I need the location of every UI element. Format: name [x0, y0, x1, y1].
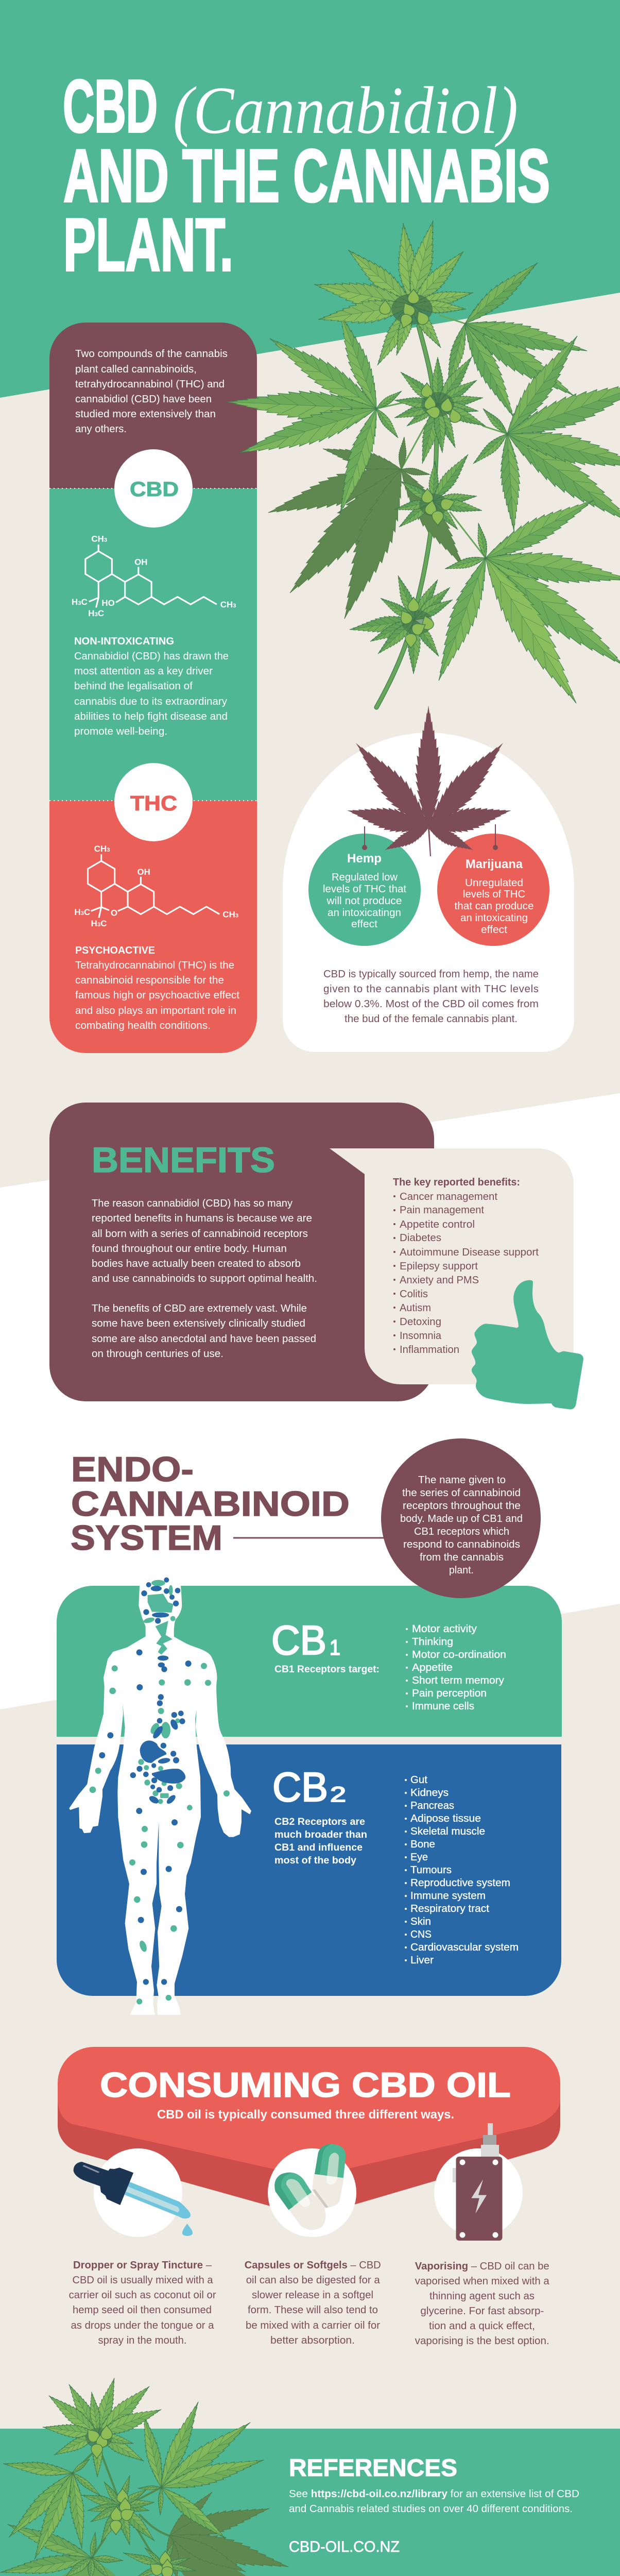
connector line — [233, 1537, 385, 1538]
text block: benefits explanation: some are also anecdotal and have been passed — [92, 1333, 316, 1345]
speech bubble: key reported benefits: Insomnia — [400, 1330, 442, 1342]
circle: definition: the series of cannabinoid — [402, 1487, 521, 1499]
leaf: left fan leaf — [226, 309, 404, 517]
background: white diagonal band — [0, 1093, 620, 1709]
list: CB2 targets: Liver — [410, 1954, 434, 1966]
chart: THC molecule: H3C — [74, 907, 90, 917]
text block: references note — [289, 2488, 579, 2515]
text block: vaporising: thinning agent such as — [429, 2290, 535, 2302]
panel section: introduction — [49, 323, 257, 488]
circle: definition: receptors throughout the — [403, 1500, 521, 1512]
heading: benefits: BENEFITS — [92, 1140, 275, 1180]
speech bubble: key reported benefits: Colitis — [400, 1288, 428, 1300]
circle: definition: plant. — [449, 1564, 474, 1576]
panel section: CBD — [49, 488, 257, 801]
text block: psychoactive: famous high or psychoactive effect — [75, 989, 239, 1001]
list: CB1 targets: Pain perception — [412, 1687, 487, 1699]
illustration: human body with receptors — [70, 1573, 251, 2014]
text block: references note: See https://cbd-oil.co.nz/library for an extensive list of CBD — [289, 2488, 579, 2500]
heading: endocannabinoid system: CANNABINOID — [71, 1484, 350, 1523]
chart: CBD molecule: H3C — [72, 597, 88, 607]
list: CB2 targets: Cardiovascular system — [410, 1941, 519, 1953]
chart: CBD molecule — [72, 534, 236, 618]
icon: thumbs up — [472, 1280, 583, 1410]
text block: non-intoxicating: cannabis due to its extraordinary — [74, 696, 228, 707]
text block: capsules or softgels: slower release in a softgel — [252, 2289, 373, 2301]
text block: CB1: 1 — [330, 1635, 340, 1659]
panel section: THC — [49, 801, 257, 1053]
bud cluster: middle — [393, 450, 483, 533]
subheading: CBD oil is typically consumed three different ways. — [157, 2108, 454, 2122]
text block: capsules or softgels: better absorption. — [270, 2334, 355, 2346]
list: CB2 targets: Respiratory tract — [410, 1903, 489, 1914]
text block: dropper or spray tincture: hemp seed oil then consumed — [73, 2304, 212, 2316]
chart: CBD molecule: OH — [134, 557, 147, 567]
chart: THC molecule: O — [111, 908, 117, 918]
text block: psychoactive: and also plays an important role in — [75, 1005, 236, 1016]
icon: vaporiser — [434, 2123, 523, 2241]
list: CB2 targets: Immune system — [410, 1890, 486, 1902]
list: CB1 targets: Immune cells — [412, 1700, 474, 1712]
circle: marijuana: that can produce — [454, 900, 533, 912]
pointer: hemp — [362, 826, 367, 850]
text block: non-intoxicating: NON-INTOXICATING — [74, 635, 174, 647]
heading: consuming CBD oil: CONSUMING CBD OIL — [100, 2065, 511, 2105]
circle: marijuana: an intoxicating — [460, 912, 528, 924]
badge: THC — [114, 763, 193, 841]
circle: definition: respond to cannabinoids — [403, 1538, 520, 1550]
heading: endocannabinoid system: ENDO- — [71, 1450, 194, 1489]
chart: THC molecule: CH3 — [94, 844, 110, 854]
banner: shadow layer — [58, 2099, 560, 2217]
text block: CB2: CB1 and influence — [274, 1842, 363, 1853]
list: CB1 targets: Thinking — [412, 1636, 453, 1648]
chart: THC molecule — [74, 844, 238, 928]
list: CB2 targets: Adipose tissue — [410, 1812, 481, 1824]
text block: CB2: most of the body — [274, 1855, 356, 1866]
text block: benefits explanation: some have been extensively clinically studied — [92, 1317, 305, 1329]
list: CB1 targets: Motor co-ordination — [412, 1649, 506, 1660]
speech bubble: key reported benefits: Pain management — [400, 1204, 484, 1216]
text block: dropper or spray tincture: Dropper or Spray Tincture – — [73, 2259, 212, 2271]
speech bubble: key reported benefits: Diabetes — [400, 1232, 441, 1244]
list: CB1 targets: Motor activity — [412, 1623, 477, 1635]
list: CB2 targets: Bone — [410, 1838, 435, 1850]
circle: definition — [381, 1438, 541, 1598]
list: CB2 targets: Tumours — [410, 1864, 452, 1876]
badge: THC: THC — [130, 791, 177, 815]
text block: CB2: CB — [272, 1764, 328, 1810]
list: CB2 targets: Gut — [410, 1774, 427, 1786]
circle: hemp: Hemp — [347, 852, 382, 866]
speech bubble: key reported benefits: The key reported benefits: — [393, 1176, 520, 1188]
list: CB1 targets: Short term memory — [412, 1674, 505, 1686]
leaf: footer left fan leaf — [2, 2457, 103, 2563]
list: CB1 targets: Appetite — [412, 1662, 453, 1673]
leaf: dark fan leaf — [264, 436, 474, 625]
circle: hemp: levels of THC that — [323, 883, 406, 895]
text block: non-intoxicating: promote well-being. — [74, 725, 167, 737]
text block: CBD source — [323, 968, 539, 1025]
text block: CB1: CB — [271, 1617, 326, 1663]
text block: psychoactive — [75, 944, 239, 1031]
text block: introduction: plant called cannabinoids, — [75, 363, 197, 375]
title: PLANT. — [63, 203, 233, 286]
panel: CBD and THC column — [49, 323, 257, 1053]
bud cluster: top — [312, 218, 475, 369]
circle: definition: CB1 receptors which — [414, 1526, 509, 1537]
title: CBD — [63, 64, 158, 148]
background: green header band — [0, 0, 620, 398]
text block: vaporising: glycerine. For fast absorp- — [420, 2305, 544, 2317]
text block: dropper or spray tincture: carrier oil such as coconut oil or — [69, 2289, 216, 2301]
circle: definition: from the cannabis — [420, 1551, 504, 1563]
text block: vaporising — [415, 2260, 549, 2347]
text block: psychoactive: PSYCHOACTIVE — [75, 944, 155, 956]
text block: benefits explanation: The reason cannabidiol (CBD) has so many — [92, 1197, 293, 1209]
receptors: green — [90, 1580, 230, 2005]
list: CB2 targets: Reproductive system — [410, 1877, 510, 1889]
text block: dropper or spray tincture: CBD oil is usually mixed with a — [72, 2274, 213, 2286]
text block: references note: and Cannabis related studies on over 40 different conditions. — [289, 2503, 573, 2515]
text block: CB1: CB1 Receptors target: — [274, 1664, 380, 1675]
panel: hemp and marijuana — [283, 705, 574, 1052]
text block: psychoactive: combating health conditions. — [75, 1020, 211, 1031]
text block: introduction — [75, 348, 228, 435]
text block: CB2: much broader than — [274, 1829, 367, 1840]
circle: marijuana: levels of THC — [463, 888, 525, 900]
circle: definition: The name given to — [418, 1474, 506, 1486]
list: CB2 targets: Eye — [410, 1851, 428, 1863]
circle: hemp: an intoxicatingn — [328, 907, 401, 919]
panel: CB2 — [57, 1744, 561, 1996]
list: CB2 targets: Skin — [410, 1916, 431, 1927]
text block: benefits explanation — [92, 1197, 317, 1360]
bud cluster: lower — [349, 573, 455, 674]
website: CBD-OIL.CO.NZ — [289, 2538, 400, 2555]
list: CB2 targets: Pancreas — [410, 1800, 454, 1811]
illustration: cannabis plant — [226, 218, 620, 712]
pointer: marijuana — [493, 824, 498, 850]
speech bubble: key reported benefits — [330, 1148, 574, 1384]
heading: endocannabinoid system — [71, 1450, 350, 1557]
text block: CBD source: below 0.3%. Most of the CBD oil comes from — [323, 998, 539, 1010]
speech bubble: key reported benefits: Detoxing — [400, 1316, 441, 1328]
text block: introduction: any others. — [75, 423, 127, 435]
leaf: right fan leaf — [470, 329, 620, 536]
badge: CBD — [114, 449, 193, 528]
banner: top layer — [58, 2047, 560, 2177]
text block: CBD source: the bud of the female cannabis plant. — [345, 1013, 518, 1025]
text block: dropper or spray tincture — [69, 2259, 216, 2346]
background: green footer band — [0, 2429, 620, 2576]
text block: capsules or softgels: be mixed with a carrier oil for — [246, 2319, 380, 2331]
circle: hemp: Regulated low — [332, 871, 398, 883]
list: CB2 targets: CNS — [410, 1928, 432, 1940]
leaf: footer dark fan leaf — [164, 2487, 291, 2576]
plant stems — [376, 315, 507, 707]
circle: marijuana — [437, 834, 549, 946]
panel: benefits — [49, 1103, 583, 1410]
speech bubble: key reported benefits: Autism — [400, 1302, 431, 1314]
text block: vaporising: vaporising is the best option. — [415, 2335, 549, 2347]
circle: hemp: effect — [351, 918, 377, 930]
text block: CB2 — [272, 1764, 367, 1866]
text block: introduction: tetrahydrocannabinol (THC) and — [75, 378, 225, 390]
leaf: upper right fan leaf — [441, 256, 590, 422]
speech bubble: key reported benefits: Anxiety and PMS — [400, 1274, 479, 1286]
speech bubble: key reported benefits: Epilepsy support — [400, 1260, 478, 1272]
text block: benefits explanation: on through centuries of use. — [92, 1348, 223, 1360]
text block: benefits explanation: all born with a series of cannabinoid receptors — [92, 1228, 308, 1240]
section: endocannabinoid system panels — [57, 1438, 562, 2014]
speech bubble: key reported benefits: Cancer management — [400, 1191, 497, 1202]
text block: benefits explanation: and use cannabinoids to support optimal health. — [92, 1273, 317, 1284]
chart: THC molecule: H3C — [91, 919, 107, 928]
circle: marijuana: effect — [481, 924, 507, 936]
chart: CBD molecule: HO — [101, 598, 115, 608]
icon: capsules — [268, 2144, 356, 2237]
chart: CBD molecule: CH3 — [220, 600, 236, 609]
text block: dropper or spray tincture: spray in the mouth. — [98, 2334, 186, 2346]
text block: introduction: studied more extensively than — [75, 408, 216, 420]
text block: benefits explanation: reported benefits in humans is because we are — [92, 1212, 312, 1224]
text block: non-intoxicating: most attention as a key driver — [74, 665, 213, 677]
chart: CBD molecule: H3C — [88, 608, 104, 618]
speech bubble: key reported benefits: Inflammation — [400, 1344, 459, 1355]
speech bubble: key reported benefits: Autoimmune Disease support — [400, 1246, 539, 1258]
icon: maroon cannabis leaf — [345, 705, 514, 856]
footer plant stems — [73, 2445, 169, 2567]
text block: CBD source: CBD is typically sourced from hemp, the name — [323, 968, 539, 980]
list: CB2 targets — [405, 1774, 519, 1966]
text block: non-intoxicating — [74, 635, 229, 737]
panel: CB1 — [57, 1586, 562, 1737]
circle: hemp — [308, 834, 421, 946]
text block: benefits explanation: The benefits of CBD are extremely vast. While — [92, 1302, 307, 1314]
text block: introduction: cannabidiol (CBD) have been — [75, 393, 212, 405]
text block: capsules or softgels — [245, 2259, 381, 2346]
section: consuming CBD oil — [58, 2047, 560, 2347]
footer: references — [289, 2454, 579, 2555]
text block: dropper or spray tincture: as drops under the tongue or a — [71, 2319, 214, 2331]
text block: vaporising: Vaporising – CBD oil can be — [415, 2260, 549, 2272]
chart: THC molecule: OH — [137, 867, 150, 877]
text block: CB2: CB2 Receptors are — [274, 1817, 365, 1827]
panel background — [49, 1103, 434, 1401]
panel background arch — [283, 733, 574, 1052]
icon: dropper — [74, 2148, 193, 2237]
text block: benefits explanation: found throughout our entire body. Human — [92, 1243, 287, 1255]
text block: capsules or softgels: form. These will also tend to — [248, 2304, 378, 2316]
receptors: blue — [99, 1578, 192, 1985]
title: (Cannabidiol) — [173, 73, 518, 148]
heading: references: REFERENCES — [289, 2454, 457, 2481]
illustration: footer cannabis plant — [0, 2376, 291, 2576]
list: CB1 targets — [406, 1623, 506, 1712]
text block: CBD source: given to the cannabis plant with THC levels — [323, 983, 539, 995]
bud cluster: upper — [393, 353, 488, 466]
text block: non-intoxicating: Cannabidiol (CBD) has drawn the — [74, 650, 229, 662]
circle: marijuana: Marijuana — [466, 857, 523, 871]
chart: CBD molecule: CH3 — [91, 534, 107, 544]
leaf: lower right fan leaf — [427, 489, 620, 712]
text block: vaporising: vaporised when mixed with a — [415, 2275, 549, 2287]
list: CB2 targets: Skeletal muscle — [410, 1825, 485, 1837]
text block: capsules or softgels: oil can also be digested for a — [246, 2274, 380, 2286]
text block: psychoactive: Tetrahydrocannabinol (THC) is the — [75, 959, 234, 971]
bud cluster: footer top — [42, 2376, 164, 2477]
text block: benefits explanation: bodies have actually been created to absorb — [92, 1258, 301, 1269]
speech bubble: key reported benefits: Appetite control — [400, 1218, 475, 1230]
heading: endocannabinoid system: SYSTEM — [71, 1518, 222, 1557]
title — [63, 64, 550, 286]
text block: non-intoxicating: behind the legalisation of — [74, 680, 193, 692]
leaf: footer bottom fan leaf — [0, 2517, 126, 2576]
text block: vaporising: tion and a quick effect, — [429, 2320, 535, 2332]
text block: CB2: 2 — [330, 1782, 346, 1806]
body silhouette — [70, 1573, 251, 2014]
circle: definition: body. Made up of CB1 and — [400, 1513, 523, 1524]
chart: THC molecule: CH3 — [222, 910, 238, 920]
list: CB2 targets: Kidneys — [410, 1787, 449, 1799]
text block: CB1 — [271, 1617, 380, 1675]
bud cluster: footer lower — [122, 2540, 197, 2576]
bud cluster: footer middle — [81, 2475, 159, 2546]
text block: psychoactive: cannabinoid responsible for the — [75, 974, 224, 986]
text block: capsules or softgels: Capsules or Softgels – CBD — [245, 2259, 381, 2271]
badge: CBD: CBD — [130, 478, 179, 501]
circle: hemp: will not produce — [326, 895, 402, 907]
circle: marijuana: Unregulated — [465, 877, 523, 889]
leaf: footer right fan leaf — [137, 2398, 266, 2544]
text block: non-intoxicating: abilities to help fight disease and — [74, 710, 228, 722]
text block: introduction: Two compounds of the cannabis — [75, 348, 228, 360]
